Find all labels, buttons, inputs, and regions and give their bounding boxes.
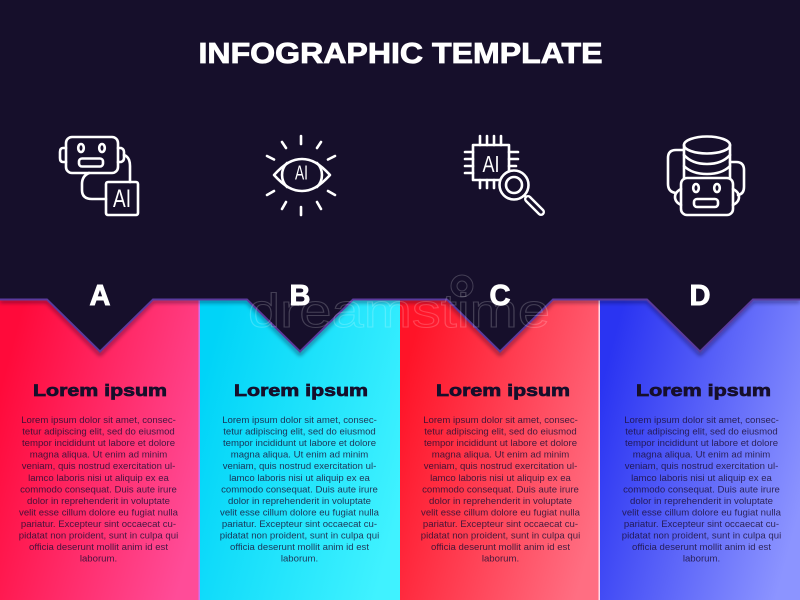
panel A body text: velit esse cillum dolore eu fugiat nulla xyxy=(19,507,179,518)
panel B body text: commodo consequat. Duis aute irure xyxy=(221,484,378,495)
notched top band xyxy=(0,0,800,352)
panel C body text: laborum. xyxy=(482,554,519,565)
panel D body text: officia deserunt mollit anim id est xyxy=(632,542,771,553)
panel: D xyxy=(600,300,800,600)
panel C background xyxy=(400,300,600,600)
panel D body text: lamco laboris nisi ut aliquip ex ea xyxy=(631,473,773,484)
panel: A xyxy=(0,300,200,600)
panel B body text: tempor incididunt ut labore et dolore xyxy=(223,438,376,449)
panel A body text: lamco laboris nisi ut aliquip ex ea xyxy=(28,473,170,484)
panel C body text: dolor in reprehenderit in voluptate xyxy=(429,496,572,507)
panel D body text: Lorem ipsum dolor sit amet, consec- xyxy=(624,415,779,426)
panel D body text: magna aliqua. Ut enim ad minim xyxy=(633,450,770,461)
icon: robot with AI box xyxy=(60,137,138,215)
panel C body text: commodo consequat. Duis aute irure xyxy=(422,484,579,495)
panel C body text: lamco laboris nisi ut aliquip ex ea xyxy=(430,473,572,484)
panel D body text: velit esse cillum dolore eu fugiat nulla xyxy=(622,507,782,518)
panel A body text: officia deserunt mollit anim id est xyxy=(29,542,168,553)
letter A: A xyxy=(90,280,111,312)
panel D body text: dolor in reprehenderit in voluptate xyxy=(630,496,773,507)
panel D body text: commodo consequat. Duis aute irure xyxy=(623,484,780,495)
panel B body text: Lorem ipsum dolor sit amet, consec- xyxy=(222,415,377,426)
panel D body text: tempor incididunt ut labore et dolore xyxy=(625,438,778,449)
panel C body text: officia deserunt mollit anim id est xyxy=(431,542,570,553)
panel B body text: laborum. xyxy=(281,554,318,565)
watermark: dreamstime xyxy=(248,284,550,337)
panel B body text: veniam, quis nostrud exercitation ul- xyxy=(223,461,376,472)
panel C body text: velit esse cillum dolore eu fugiat nulla xyxy=(421,507,581,518)
icon: robot with database xyxy=(668,136,744,215)
panel C body text: Lorem ipsum dolor sit amet, consec- xyxy=(423,415,578,426)
panel B body text: pariatur. Excepteur sint occaecat cu- xyxy=(222,519,377,530)
panel C body text: magna aliqua. Ut enim ad minim xyxy=(432,450,569,461)
panel B background xyxy=(200,300,400,600)
panel D body text: pidatat non proident, sunt in culpa qui xyxy=(622,530,781,542)
panel B heading: Lorem ipsum xyxy=(234,381,368,400)
panel A body text: pidatat non proident, sunt in culpa qui xyxy=(19,530,178,542)
panel B body text: pidatat non proident, sunt in culpa qui xyxy=(220,530,379,542)
icon: AI eye xyxy=(267,136,335,215)
AI label on box: AI xyxy=(113,185,131,213)
panel C edge highlight xyxy=(598,300,600,600)
panel A body text: commodo consequat. Duis aute irure xyxy=(20,484,177,495)
letter C: C xyxy=(490,280,511,312)
panel D heading: Lorem ipsum xyxy=(636,381,771,400)
panel B body text: tetur adipiscing elit, sed do eiusmod xyxy=(223,427,376,438)
panel C body text: veniam, quis nostrud exercitation ul- xyxy=(424,461,577,472)
panel C body text: pariatur. Excepteur sint occaecat cu- xyxy=(423,519,578,530)
letter B: B xyxy=(290,280,310,312)
watermark xyxy=(248,275,550,337)
panel C body text: tetur adipiscing elit, sed do eiusmod xyxy=(424,427,577,438)
panel B body text: dolor in reprehenderit in voluptate xyxy=(228,496,371,507)
panel D body text: pariatur. Excepteur sint occaecat cu- xyxy=(624,519,779,530)
panel A body text: veniam, quis nostrud exercitation ul- xyxy=(22,461,175,472)
panel D body text: laborum. xyxy=(683,554,720,565)
title: INFOGRAPHIC TEMPLATE xyxy=(198,38,602,70)
panel A body text: Lorem ipsum dolor sit amet, consec- xyxy=(21,415,176,426)
letter D: D xyxy=(690,280,710,312)
panel C body text: tempor incididunt ut labore et dolore xyxy=(424,438,577,449)
panel C body text: pidatat non proident, sunt in culpa qui xyxy=(421,530,580,542)
panel C heading: Lorem ipsum xyxy=(436,381,570,400)
panel B body text: officia deserunt mollit anim id est xyxy=(230,542,369,553)
icon: AI chip with magnifier xyxy=(465,136,541,212)
panel D body text: veniam, quis nostrud exercitation ul- xyxy=(625,461,778,472)
AI label on chip: AI xyxy=(482,151,500,177)
panel A body text: pariatur. Excepteur sint occaecat cu- xyxy=(21,519,176,530)
panel B body text: lamco laboris nisi ut aliquip ex ea xyxy=(229,473,371,484)
notch shadow xyxy=(0,301,800,354)
panel A body text: tetur adipiscing elit, sed do eiusmod xyxy=(22,427,175,438)
panel A body text: tempor incididunt ut labore et dolore xyxy=(22,438,175,449)
panel B body text: magna aliqua. Ut enim ad minim xyxy=(231,450,368,461)
panel: C xyxy=(400,300,600,600)
AI label in eye: AI xyxy=(295,162,308,184)
panel D body text: tetur adipiscing elit, sed do eiusmod xyxy=(625,427,778,438)
panel A body text: dolor in reprehenderit in voluptate xyxy=(27,496,170,507)
panel A background xyxy=(0,300,200,600)
panel A body text: laborum. xyxy=(80,554,117,565)
panel B body text: velit esse cillum dolore eu fugiat nulla xyxy=(220,507,380,518)
panel A body text: magna aliqua. Ut enim ad minim xyxy=(30,450,167,461)
panel D background xyxy=(600,300,800,600)
panel A edge highlight xyxy=(198,300,200,600)
panel A heading: Lorem ipsum xyxy=(33,381,167,400)
panel: B xyxy=(200,300,400,600)
